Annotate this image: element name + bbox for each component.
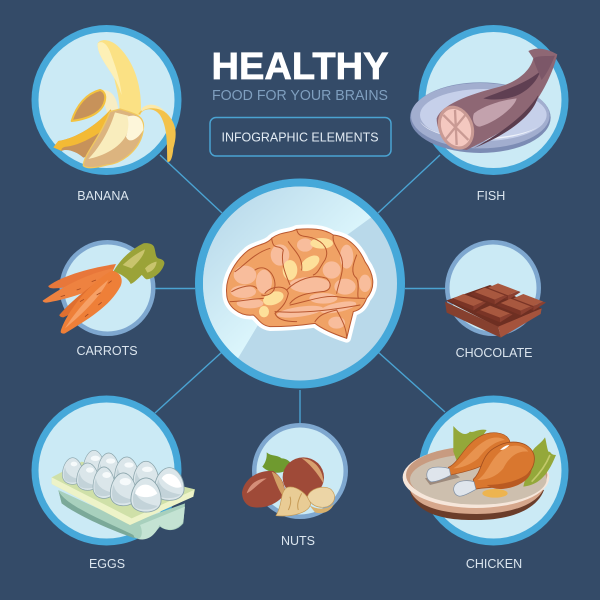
icon: carrots: [43, 243, 164, 334]
label: fish: FISH: [477, 189, 505, 203]
icon: chicken on plate: [403, 426, 556, 520]
icon: brain: [227, 229, 373, 338]
panel: eggs: [32, 396, 195, 546]
title: HEALTHY: [212, 46, 388, 88]
icon: banana: [53, 40, 176, 168]
panel: nuts: [242, 423, 348, 519]
icon: egg carton: [52, 450, 195, 539]
badge: infographic elements: [210, 118, 391, 156]
label: nuts: NUTS: [281, 534, 315, 548]
badge: infographic elements: INFOGRAPHIC ELEMENTS: [222, 130, 379, 144]
label: chicken: CHICKEN: [466, 557, 522, 571]
label: chocolate: CHOCOLATE: [456, 346, 532, 360]
subtitle: FOOD FOR YOUR BRAINS: [212, 88, 388, 104]
label: eggs: EGGS: [89, 557, 125, 571]
panel: chicken: [403, 396, 568, 546]
panel: fish: [410, 25, 568, 175]
panel: chocolate: [445, 240, 546, 338]
panel: carrots: [43, 240, 164, 336]
label: carrots: CARROTS: [76, 344, 138, 358]
icon: nuts: [242, 452, 335, 516]
icon: chocolate bar: [445, 283, 546, 338]
panel: banana: [32, 25, 182, 175]
label: banana: BANANA: [77, 189, 129, 203]
panel: brain: [190, 170, 405, 388]
icon: fish on plate: [410, 49, 557, 155]
